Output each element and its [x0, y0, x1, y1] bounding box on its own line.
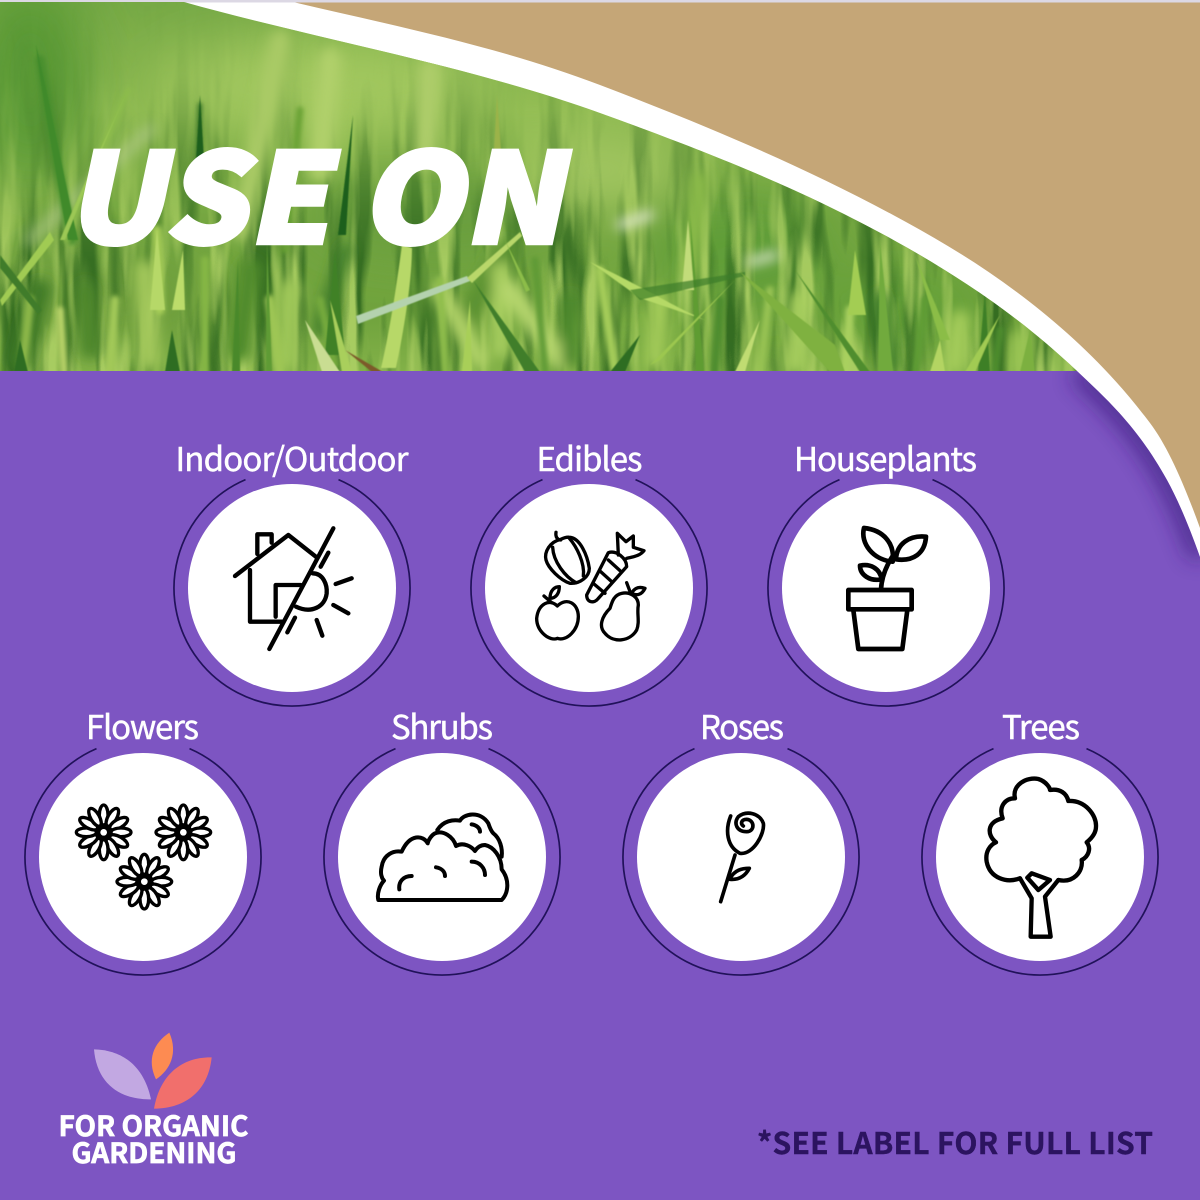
item: Edibles	[471, 433, 707, 706]
item: Trees: Trees	[1002, 701, 1080, 749]
tan corner panel	[295, 2, 1200, 528]
panel shadow along curve	[1077, 371, 1200, 557]
icon: tree	[986, 779, 1096, 937]
item: Shrubs	[324, 701, 560, 975]
icon: three daisies	[76, 805, 211, 909]
item: Trees	[922, 701, 1158, 975]
footnote: *SEE LABEL FOR FULL LIST	[757, 1119, 1153, 1163]
icon: potted plant	[848, 528, 926, 649]
item: Flowers: Flowers	[86, 701, 199, 749]
top strip	[0, 0, 1200, 2]
item: Indoor/Outdoor	[174, 433, 410, 706]
icon: three leaves	[94, 1033, 212, 1109]
icon: rose	[721, 813, 763, 902]
item: Houseplants: Houseplants	[794, 433, 977, 481]
logo: For Organic Gardening: FOR ORGANIC	[58, 1105, 248, 1145]
item: Flowers	[25, 701, 261, 975]
item: Edibles: Edibles	[536, 433, 642, 481]
heading: USE ON: USE ON	[57, 99, 593, 280]
item: Roses	[623, 701, 859, 975]
logo: For Organic Gardening	[58, 1033, 248, 1172]
item: Shrubs: Shrubs	[391, 701, 493, 749]
logo: For Organic Gardening: GARDENING	[72, 1132, 236, 1172]
item: Indoor/Outdoor: Indoor/Outdoor	[176, 433, 409, 481]
icon: shrub	[378, 814, 507, 900]
icon: fruit and vegetables	[537, 532, 645, 640]
panel: purple background	[0, 371, 1200, 1200]
item: Roses: Roses	[700, 701, 784, 749]
item: Houseplants	[768, 433, 1004, 706]
photo: grass banner	[0, 2, 1077, 371]
icon: house and sun	[235, 528, 352, 649]
